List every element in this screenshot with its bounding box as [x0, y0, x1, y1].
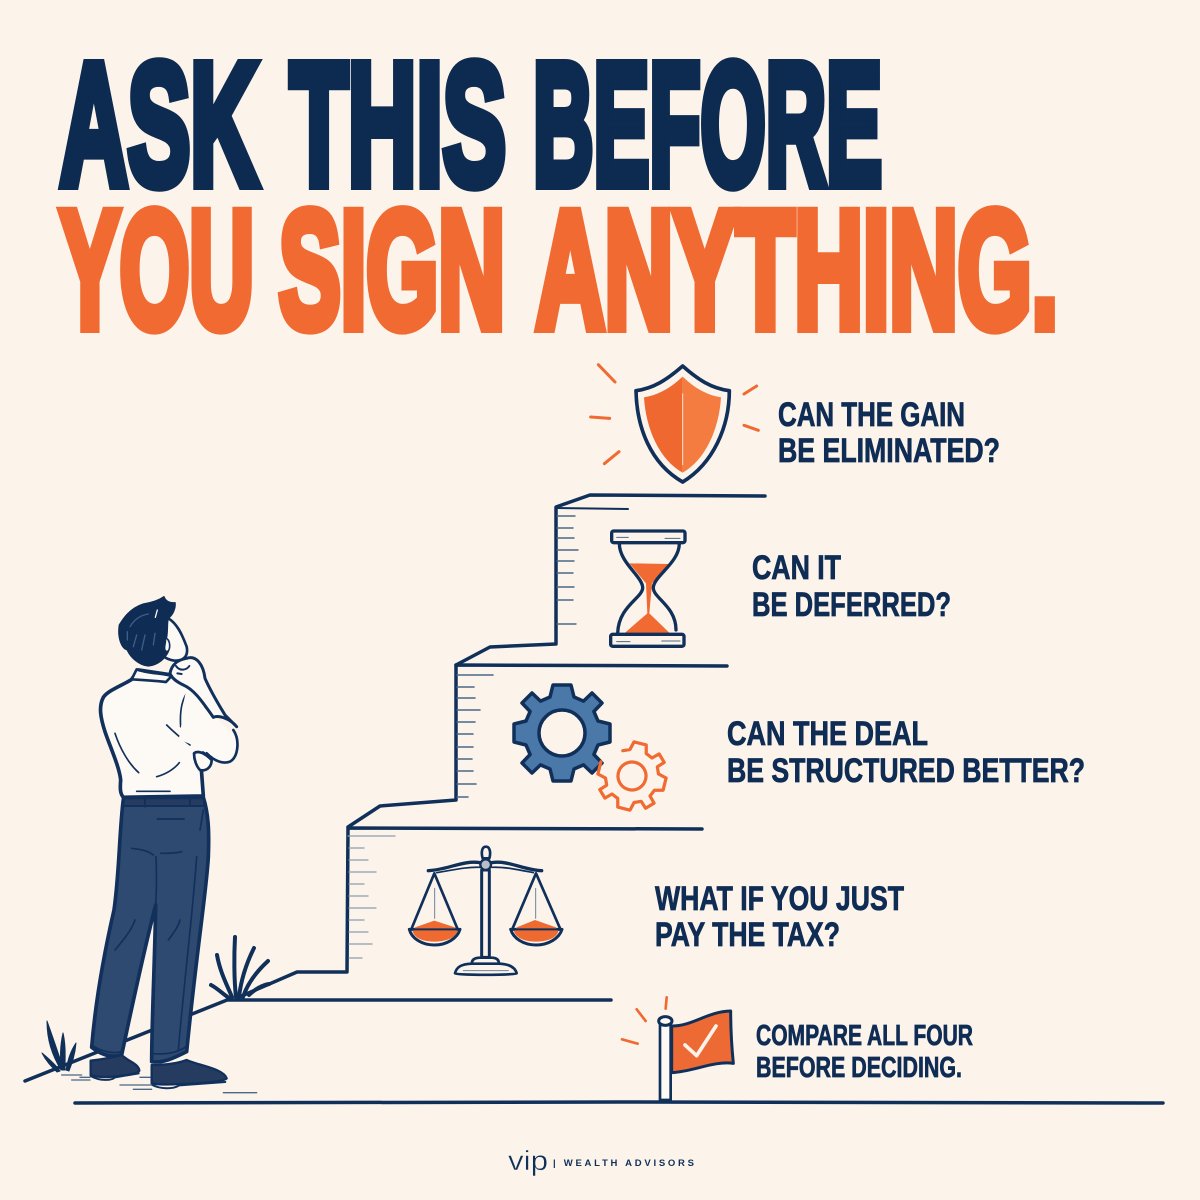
shirt folds	[115, 693, 190, 791]
trouser details	[93, 810, 203, 1054]
label: what if you just pay the tax	[655, 880, 904, 954]
title line 2: YOU	[60, 178, 254, 363]
title line 2	[60, 178, 1058, 363]
label: can the gain be eliminated: BE ELIMINATED?	[778, 432, 1000, 470]
staircase	[25, 495, 765, 1081]
check mark	[685, 1026, 716, 1056]
hair	[119, 597, 175, 666]
title line 2: SIGN	[279, 178, 505, 363]
label: can the deal be structured better: CAN THE DEAL	[727, 715, 928, 753]
shield rays	[591, 365, 758, 464]
man figure	[62, 597, 257, 1093]
belt	[123, 798, 204, 807]
icon: gears	[514, 685, 673, 817]
raised forearm and hand	[170, 658, 237, 727]
fingers	[176, 666, 189, 674]
crossed arm	[178, 690, 236, 762]
title line 1: THIS	[290, 27, 506, 221]
flag rays	[622, 997, 667, 1044]
icon: hourglass	[611, 531, 685, 646]
logo	[508, 1145, 694, 1176]
trousers	[92, 797, 209, 1062]
label: can the deal be structured better	[727, 715, 1085, 790]
large blue gear	[514, 685, 610, 781]
ear	[166, 638, 170, 652]
ground hatching	[62, 1075, 257, 1093]
label: can the gain be eliminated: CAN THE GAIN	[778, 396, 965, 434]
left shoe	[91, 1055, 139, 1077]
right shoe	[152, 1060, 227, 1084]
hair highlight	[155, 610, 157, 617]
label: can the gain be eliminated	[778, 396, 1000, 470]
head and face	[158, 618, 187, 661]
collar	[132, 669, 172, 682]
label: compare all four: COMPARE ALL FOUR	[756, 1020, 973, 1052]
label: compare all four: BEFORE DECIDING.	[756, 1052, 962, 1084]
small orange gear	[591, 735, 673, 817]
hair texture	[127, 614, 155, 650]
icon: balance scales	[409, 847, 562, 975]
shirt	[101, 670, 207, 797]
title	[60, 27, 1058, 363]
logo: vip	[508, 1145, 548, 1176]
icon: flag	[622, 997, 733, 1100]
label: can the deal be structured better: BE STRUCTURED BETTER?	[727, 752, 1085, 790]
icon: shield	[591, 365, 758, 482]
label: can it be deferred: BE DEFERRED?	[752, 586, 951, 624]
title line 1: ASK	[60, 27, 258, 221]
baseline ground line	[75, 1102, 1163, 1103]
icon: plant left	[42, 1021, 76, 1072]
label: can it be deferred	[752, 549, 951, 624]
label: what if you just pay the tax: PAY THE TAX?	[655, 916, 840, 954]
title line 1	[60, 27, 882, 221]
label: compare all four	[756, 1020, 973, 1084]
icon: plant right	[211, 937, 269, 998]
label: what if you just pay the tax: WHAT IF YOU JUST	[655, 880, 904, 918]
logo: | WEALTH ADVISORS	[553, 1158, 694, 1169]
label: can it be deferred: CAN IT	[752, 549, 841, 587]
left shoe sole	[91, 1073, 139, 1080]
right shoe sole	[152, 1082, 225, 1088]
